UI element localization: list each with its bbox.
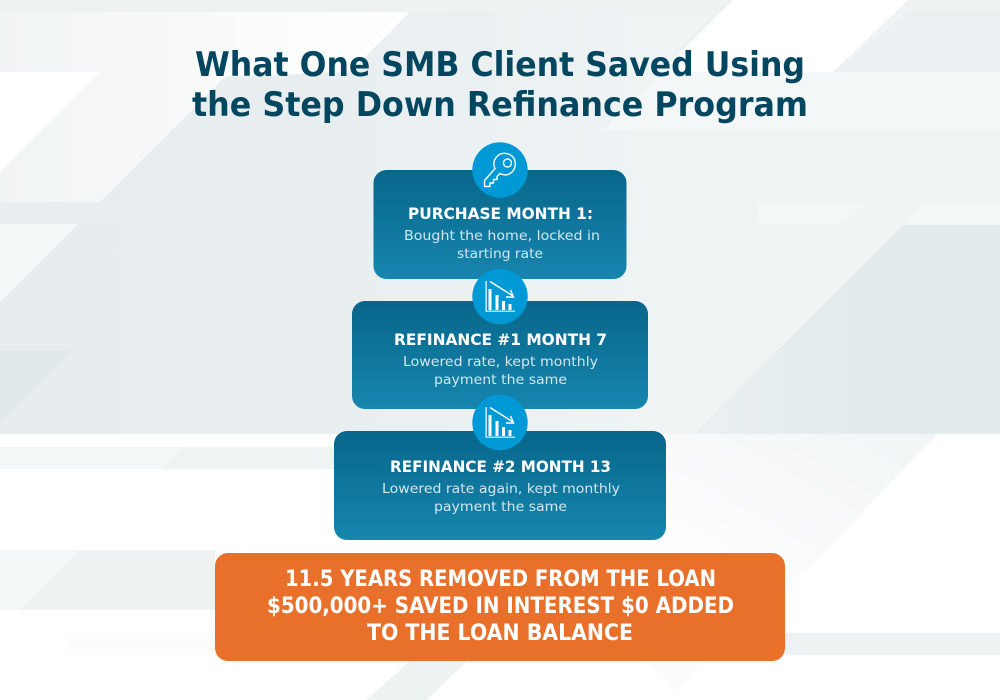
panel: refinance 2 month 13: Lowered rate again, kept monthly — [382, 481, 620, 497]
panel: refinance 2 month 13: REFINANCE #2 MONTH 13 — [390, 457, 611, 476]
panel: purchase month 1: PURCHASE MONTH 1: — [408, 204, 593, 223]
title — [192, 45, 808, 125]
panel: refinance 1 month 7: Lowered rate, kept monthly — [403, 354, 598, 370]
panel: refinance 1 month 7 — [352, 301, 648, 409]
callout: results: 11.5 YEARS REMOVED FROM THE LOAN — [285, 567, 716, 592]
icon: falling bar chart 1 — [472, 269, 528, 324]
callout: results: TO THE LOAN BALANCE — [367, 621, 633, 646]
callout: results: $500,000+ SAVED IN INTEREST $0 ADDED — [267, 594, 734, 619]
panel: refinance 2 month 13 — [334, 431, 666, 540]
callout: results — [215, 553, 785, 661]
panel: refinance 1 month 7: payment the same — [434, 372, 567, 388]
panel: purchase month 1 — [374, 170, 626, 279]
panel: refinance 1 month 7: REFINANCE #1 MONTH 7 — [394, 330, 607, 349]
panel: purchase month 1: Bought the home, locked in — [404, 228, 600, 244]
icon: key — [472, 142, 528, 198]
title: the Step Down Refinance Program — [192, 85, 808, 125]
title: What One SMB Client Saved Using — [195, 45, 805, 85]
panel: refinance 2 month 13: payment the same — [434, 499, 567, 515]
panel: purchase month 1: starting rate — [457, 246, 543, 262]
icon: falling bar chart 2 — [472, 395, 528, 450]
